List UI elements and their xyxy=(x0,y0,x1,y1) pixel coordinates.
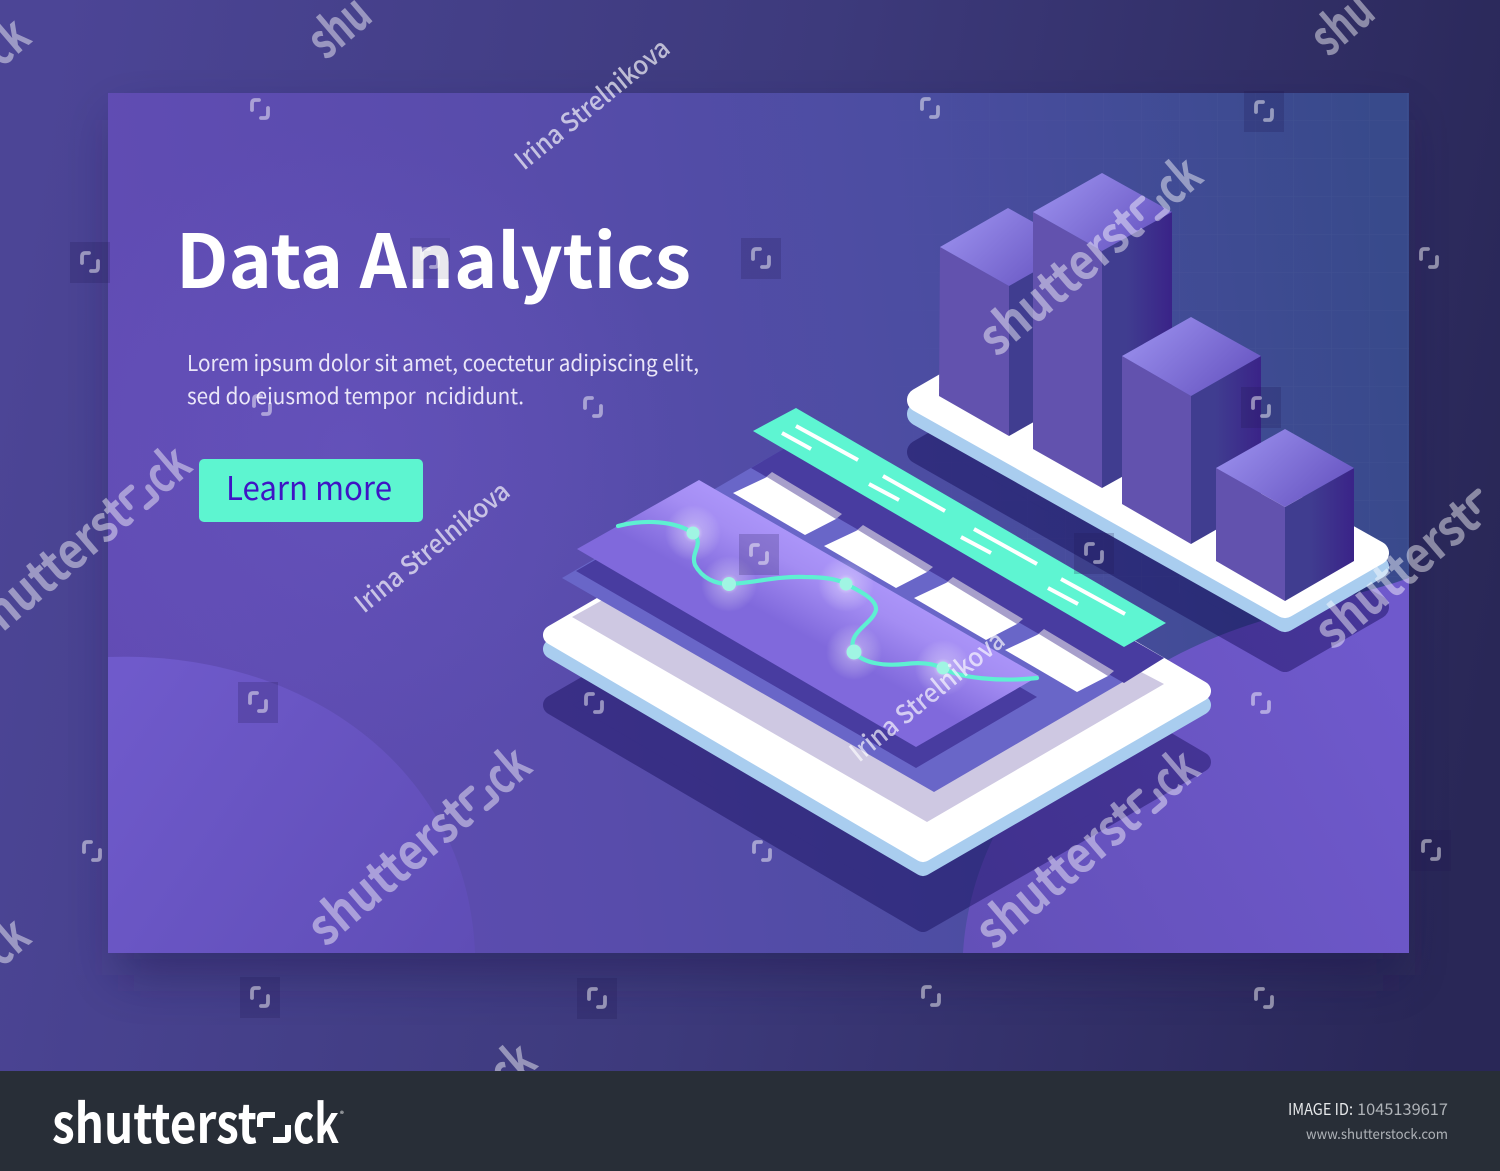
decorative blob bottom right xyxy=(963,578,1409,953)
button: learn more xyxy=(199,459,423,522)
button: learn more: Learn more xyxy=(226,462,392,510)
watermarks: shutterstock: ck xyxy=(465,727,544,809)
watermarks: author name: Irina Strelnikova xyxy=(506,29,677,177)
line chart data points xyxy=(686,526,950,674)
chart panel shadow xyxy=(576,500,1037,768)
faint grid xyxy=(850,93,1409,593)
upper platform edge xyxy=(919,361,1377,620)
chart panel xyxy=(577,480,1039,747)
watermark icons xyxy=(82,99,1439,1007)
body text: Lorem ipsum dolor sit amet, coectetur adipiscing elit, xyxy=(187,346,699,378)
watermarks: shutterstock: ck xyxy=(125,426,204,508)
lower platform edge xyxy=(553,488,1201,866)
lilac layer xyxy=(572,480,1164,822)
title: Data Analytics xyxy=(176,203,691,310)
illustration: upper platform with bar chart xyxy=(919,173,1377,620)
blue layer xyxy=(562,444,1164,792)
line chart curve xyxy=(618,522,1037,680)
lower platform shadow xyxy=(553,545,1201,922)
watermarks: shutterstock: ck xyxy=(470,1023,549,1105)
watermarks: author name: Irina Strelnikova xyxy=(841,621,1012,769)
card background xyxy=(108,93,1409,953)
watermarks: author name xyxy=(346,29,1012,769)
cell 1 xyxy=(733,472,842,535)
table row cells xyxy=(733,472,1114,692)
illustration: lower platform with line chart xyxy=(553,399,1377,922)
footer logo: shutterst xyxy=(52,1080,257,1159)
body text xyxy=(187,346,699,411)
watermarks: shutterstock: ck xyxy=(1136,137,1215,219)
teal header strip xyxy=(753,408,1166,647)
watermarks: author name: Irina Strelnikova xyxy=(346,472,517,620)
bar 2 xyxy=(1033,173,1172,488)
lower platform surface xyxy=(553,474,1201,852)
watermark icon boxes xyxy=(70,91,1451,1019)
decorative blob bottom left xyxy=(108,657,475,953)
bar 1 xyxy=(939,208,1078,436)
registered mark: ® xyxy=(340,1109,344,1120)
cell 3 xyxy=(914,577,1023,640)
soft highlight behind text xyxy=(108,120,768,780)
upper platform shadow xyxy=(919,399,1377,660)
watermarks: shutterstock: shutterst xyxy=(289,777,485,959)
image id: IMAGE ID: xyxy=(1288,1096,1353,1120)
cell 4 xyxy=(1005,629,1114,692)
footer logo: ck xyxy=(293,1080,339,1159)
upper platform surface xyxy=(919,347,1377,606)
website url: www.shutterstock.com xyxy=(1306,1124,1448,1144)
card drop shadow xyxy=(118,120,1399,975)
body text: sed do eiusmod tempor ncididunt. xyxy=(187,379,524,411)
watermarks: shutterstock: shutterst xyxy=(960,187,1156,369)
bar 4 xyxy=(1216,429,1354,601)
panel: landing card xyxy=(108,93,1409,953)
image id: 1045139617 xyxy=(1357,1096,1448,1120)
dark header band xyxy=(751,444,1164,683)
bar 3 xyxy=(1122,317,1261,544)
line chart glow points xyxy=(665,505,971,696)
watermarks: shutterstock: ck xyxy=(1133,730,1212,812)
image id xyxy=(1288,1096,1448,1120)
teal strip label lines xyxy=(782,426,1125,614)
footer bar xyxy=(0,1071,1500,1171)
watermarks: shutterstock: shutterst xyxy=(957,780,1153,962)
cell 2 xyxy=(824,525,933,588)
